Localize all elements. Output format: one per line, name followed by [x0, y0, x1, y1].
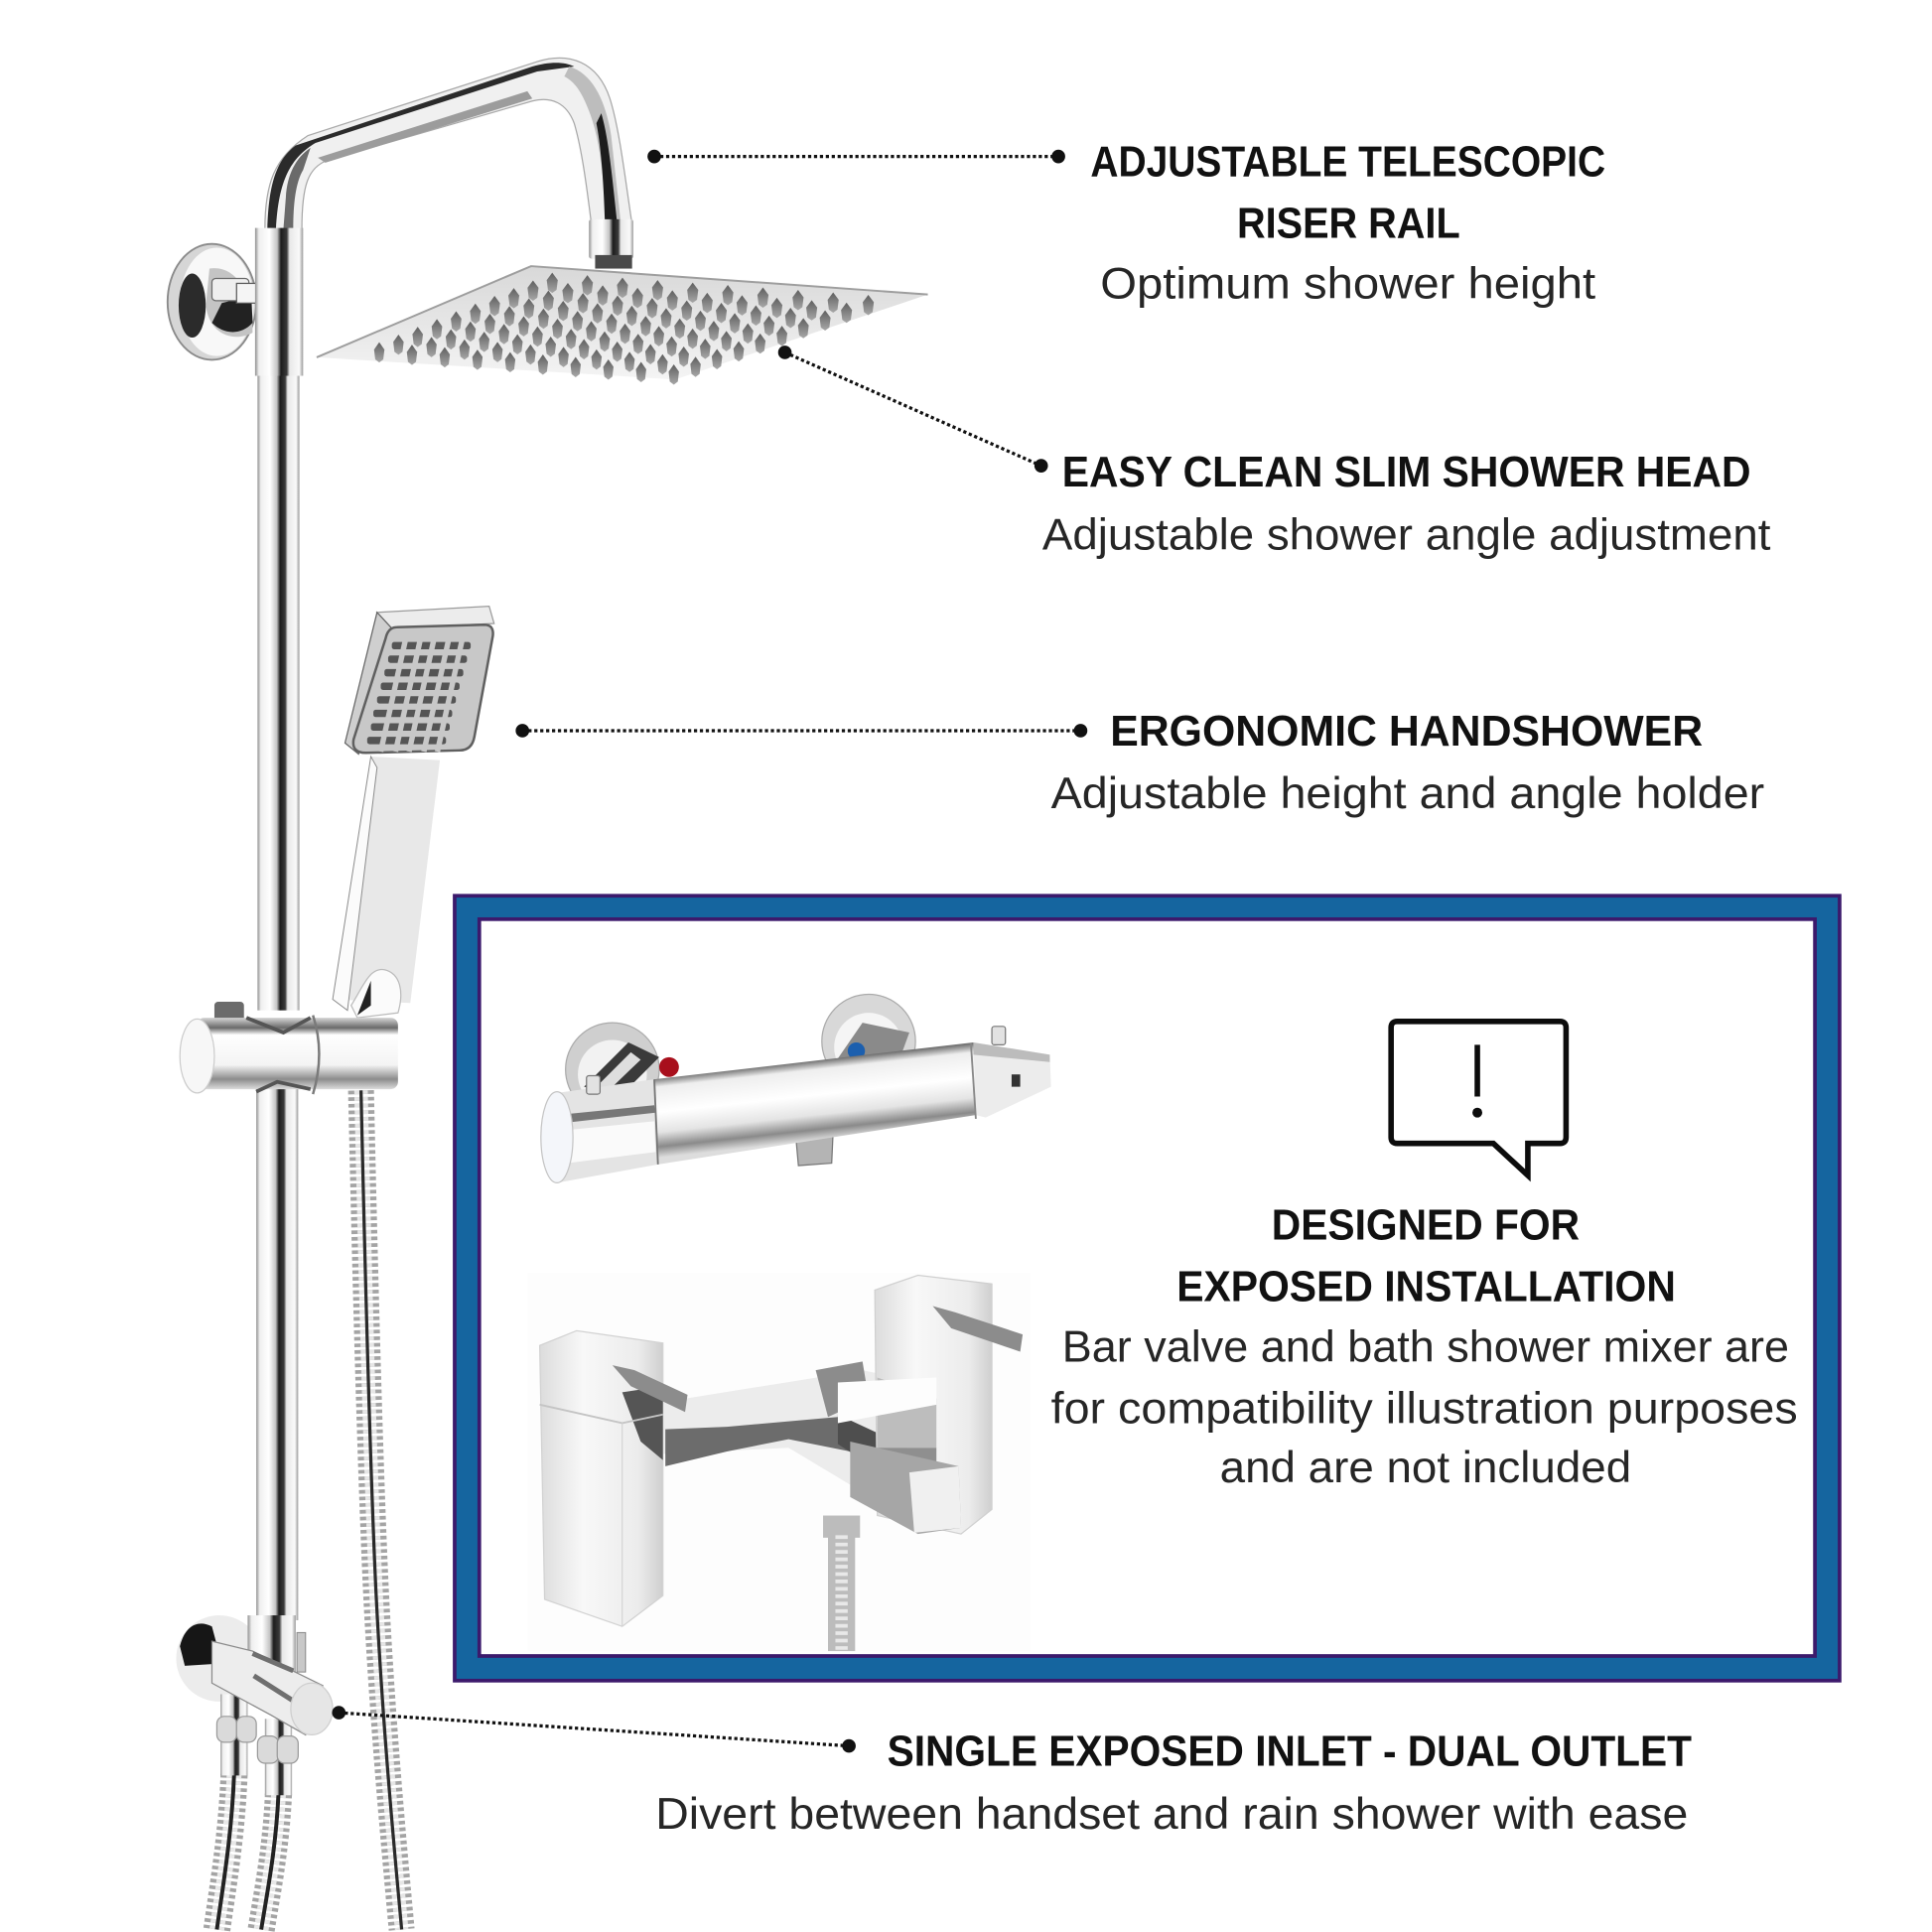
text block: exposed installation note [1051, 1202, 1798, 1492]
panel: exposed installation frame [455, 896, 1840, 1681]
text block: dual outlet [655, 1727, 1692, 1839]
text block: exposed installation note: EXPOSED INSTALLATION [1176, 1264, 1676, 1311]
icon: upper wall mount [168, 244, 276, 359]
icon: diverter inlet [176, 1615, 333, 1795]
text block: exposed installation note: for compatibility illustration purposes [1051, 1384, 1798, 1433]
icon: lower hoses [216, 1774, 278, 1930]
leader: dual outlet [332, 1706, 856, 1752]
text block: telescopic riser rail: ADJUSTABLE TELESCOPIC [1090, 138, 1605, 186]
text block: exposed installation note: and are not included [1220, 1444, 1631, 1492]
text block: slim shower head [1042, 449, 1771, 560]
text block: dual outlet: SINGLE EXPOSED INLET - DUAL OUTLET [888, 1727, 1692, 1775]
leader: handshower [515, 724, 1087, 738]
text block: ergonomic handshower: Adjustable height and angle holder [1051, 769, 1764, 818]
icon: thermostatic bar valve [541, 995, 1051, 1182]
text block: exposed installation note: Bar valve and bath shower mixer are [1062, 1322, 1789, 1371]
icon: hand shower [333, 607, 494, 1018]
icon: rain shower head [317, 266, 928, 384]
icon: riser rail [256, 369, 300, 1620]
text block: ergonomic handshower [1051, 708, 1764, 818]
text block: slim shower head: Adjustable shower angle adjustment [1042, 511, 1771, 560]
icon: slide bracket [180, 1002, 398, 1094]
text block: telescopic riser rail: Optimum shower height [1100, 259, 1596, 308]
text block: exposed installation note: DESIGNED FOR [1272, 1202, 1580, 1250]
icon: shower head swivel [589, 219, 633, 269]
text block: ergonomic handshower: ERGONOMIC HANDSHOWER [1110, 708, 1703, 756]
icon: telescopic arm [265, 58, 632, 229]
shower hose [361, 1090, 402, 1930]
leader: telescopic rail [647, 150, 1065, 163]
icon: rail sleeve [255, 228, 303, 376]
icon: bath shower mixer [527, 1273, 1031, 1651]
text block: slim shower head: EASY CLEAN SLIM SHOWER HEAD [1062, 449, 1751, 496]
text block: dual outlet: Divert between handset and rain shower with ease [655, 1790, 1688, 1839]
text block: telescopic riser rail [1090, 138, 1605, 308]
icon: alert speech bubble [1391, 1022, 1566, 1175]
text block: telescopic riser rail: RISER RAIL [1237, 201, 1460, 248]
leader: shower head [778, 345, 1048, 473]
